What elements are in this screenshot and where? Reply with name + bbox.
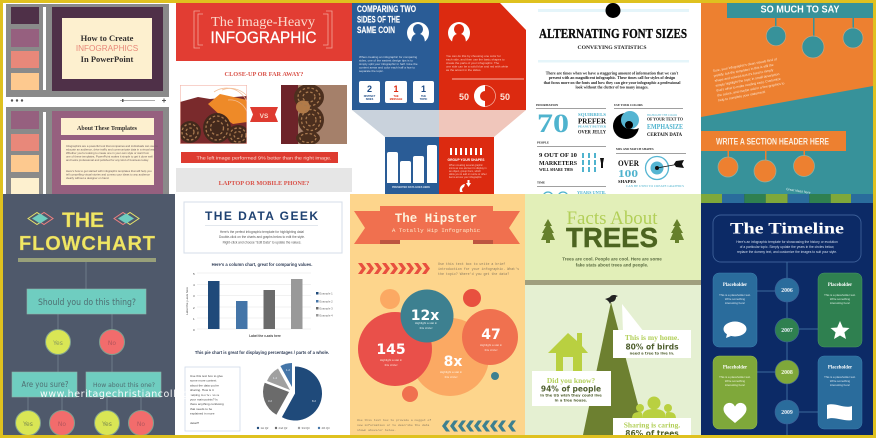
heading: SO MUCH TO SAY	[760, 4, 840, 16]
card 2008: Placeholder	[723, 366, 748, 370]
slide title: In PowerPoint	[81, 54, 133, 64]
text box: Use this text box to give	[190, 374, 223, 378]
pie chart: 1.4	[273, 376, 277, 380]
year 2009	[775, 400, 799, 424]
text box: that needs to be	[190, 407, 212, 411]
group shapes text: When creating several graphic	[449, 164, 484, 167]
about text: tell compelling visual stories and convey your ideas to any audience	[66, 172, 150, 176]
bubble chart: Highlight a stat in	[415, 321, 437, 325]
header frame: Right-click and choose "Edit Data" to update the values.	[223, 240, 302, 244]
box: are you sure: Are you sure?	[22, 380, 69, 389]
section header	[701, 131, 846, 151]
about heading: About These Templates	[77, 126, 138, 132]
bar chart	[387, 145, 437, 189]
teal hanging circles	[766, 18, 863, 58]
section: information: PEANUT BUTTER	[578, 124, 607, 128]
title: THE	[62, 209, 104, 232]
section: people: WILL SHARE THIS	[539, 167, 574, 172]
text box: explained in more	[190, 412, 215, 416]
heading	[211, 16, 316, 44]
bubble chart	[358, 289, 518, 402]
text box: helping to drive home	[190, 393, 220, 397]
slanted text: help to complete your statement!	[718, 90, 766, 102]
column chart: 0	[193, 328, 195, 332]
column chart: 4	[193, 283, 195, 287]
intro text	[562, 256, 662, 268]
card 2009: Placeholder	[828, 366, 853, 370]
right text: as the accent in the slides.	[446, 68, 482, 72]
stat cards: THE	[421, 95, 426, 98]
year 2006: 2006	[781, 288, 793, 294]
group shapes text: allow you to add or resize or other	[449, 173, 487, 176]
callout: sharing: 86% of trees	[625, 429, 679, 438]
callout: did you know	[532, 371, 611, 406]
year 2006	[775, 278, 799, 302]
section: shapes	[616, 147, 686, 188]
icon: black dot	[606, 3, 620, 18]
pie chart: 3.2	[268, 399, 272, 403]
left text: When creating an infographic for comparing	[359, 55, 418, 59]
year 2008: 2008	[781, 370, 793, 376]
intro paragraph	[544, 72, 681, 90]
bubble chart: 145	[376, 342, 406, 358]
slide title: How to Create	[81, 33, 134, 43]
pie legend: 1st Qtr	[260, 426, 269, 430]
title	[566, 208, 658, 253]
bubble chart: Highlight a stat in	[380, 358, 402, 362]
column chart: 5	[193, 272, 195, 276]
section: shapes: SHAPES	[618, 179, 637, 184]
bubble chart: Highlight a stat in	[440, 370, 462, 374]
chart legend: Example 2	[320, 300, 333, 304]
panel: the timeline	[701, 194, 873, 435]
donut stat: 50	[500, 92, 510, 102]
pie chart	[263, 363, 322, 420]
panel: facts about trees	[525, 194, 701, 438]
stat cards: TOPIC	[420, 98, 427, 101]
group shapes text: an object, group them, which	[449, 170, 482, 173]
section: shapes: MIX AND MATCH SHAPES	[616, 147, 654, 151]
slanted text: Sure, your infographic's clean visuals kind of	[712, 57, 777, 73]
pie legend: 4th Qtr	[322, 426, 330, 430]
text box: your main points? Is	[190, 398, 218, 402]
header box: Here's an infographic template for showcasing the history or evolution	[736, 240, 838, 244]
stat cards: 1	[421, 84, 426, 94]
year 2009: 2009	[781, 410, 793, 416]
callout: did you know: in the US wish they could live	[540, 394, 602, 398]
title: Facts About	[566, 208, 658, 229]
group shapes text: icons as one element to display in	[449, 167, 487, 170]
section: people: MARKETERS	[539, 160, 577, 167]
callout: my home	[613, 330, 691, 358]
bottom nodes: Yes	[101, 421, 112, 428]
heading: INFOGRAPHIC	[210, 28, 316, 47]
group shapes text	[448, 148, 487, 192]
orange hanging circles	[718, 151, 814, 182]
section: people: 9 OUT OF 10	[539, 152, 577, 159]
outro text: shown above/or below.	[357, 428, 396, 432]
section: shapes: CAN BE USED TO CREATE GRAPHICS	[626, 184, 684, 188]
card 2007: Write something	[830, 297, 851, 301]
result bar	[181, 152, 338, 163]
about text: Infographics are a powerful tool that companies and individuals can use to	[66, 144, 158, 148]
callout: my home: 80% of birds	[625, 342, 679, 352]
slanted text: shape and colored text it's hard to simply	[714, 68, 774, 83]
outro text: new information or to describe the data	[357, 423, 430, 427]
year 2007: 2007	[781, 328, 793, 334]
about text: and looks professional and polished for any kind of business today.	[66, 158, 149, 162]
card 2009: This is a placeholder text.	[824, 375, 856, 379]
section: people	[537, 140, 606, 172]
section: time: YEARS UNTIL	[577, 190, 606, 195]
column chart: Label the y-axis here	[185, 287, 189, 315]
section: people: PEOPLE	[537, 140, 549, 144]
card 2006: Write something	[725, 297, 746, 301]
stat cards: THE	[394, 95, 399, 98]
icon: person red	[448, 22, 470, 44]
photo 1	[179, 85, 249, 145]
bubble chart: 47	[481, 327, 501, 343]
panel: alternating font sizes	[527, 3, 701, 202]
left text: separate the topic.	[359, 69, 384, 73]
header box: The Timeline	[730, 220, 844, 238]
slide controls	[11, 98, 166, 102]
card 2008	[713, 356, 757, 429]
ribbon banner	[354, 206, 520, 244]
slanted text: prettify, but the templates in this is still the	[713, 63, 774, 78]
right text: one side can be a solid blue and red with white	[446, 64, 509, 68]
section: information: PREFER	[578, 118, 607, 126]
left text	[359, 55, 418, 73]
chart legend: Example 4	[320, 314, 333, 318]
intro paragraph: that focus more on the fonts and how they can give your infographic a professional	[544, 81, 681, 85]
icon: person blue	[407, 22, 429, 44]
no node: No	[108, 340, 116, 347]
header frame: THE DATA GEEK	[205, 209, 318, 223]
intro text: Trees are cool. People are cool. Here are some	[562, 256, 662, 262]
chart title: Here's a column chart, great for comparing values.	[212, 262, 312, 267]
stat cards: SIDES	[366, 98, 374, 101]
section: information	[536, 104, 606, 134]
question 2: LAPTOP OR MOBILE PHONE?	[219, 180, 309, 187]
text box: sharing. How is it	[190, 388, 214, 392]
intro text	[438, 262, 519, 276]
donut stat	[459, 85, 510, 107]
card 2007: This is a placeholder text.	[824, 293, 856, 297]
question 1: CLOSE-UP OR FAR AWAY?	[225, 71, 303, 78]
left text: sides, one of the easiest design tips is to	[359, 58, 413, 62]
icon: right diamond	[114, 212, 139, 224]
right text: create the parts of your infographic. The	[446, 61, 499, 65]
card 2007: interesting here!	[830, 301, 850, 305]
callout: did you know: 94% of people	[541, 384, 601, 394]
slanted text	[712, 57, 786, 102]
text box: detail?	[190, 421, 199, 425]
donut stat: 50	[459, 92, 469, 102]
bubble chart: this circle!	[385, 363, 398, 367]
question box	[27, 289, 146, 314]
year 2008	[775, 360, 799, 384]
panel: the flowchart	[3, 194, 175, 436]
funnel	[352, 110, 526, 137]
panel: the data geek	[175, 194, 350, 435]
panel: the hipster	[350, 194, 525, 435]
right text: You can do this by choosing one color for	[446, 54, 501, 58]
left text: simply split your infographic in half. Give the	[359, 62, 418, 66]
pie legend: 3rd Qtr	[302, 426, 310, 430]
about text: one of these templates, PowerPoint makes it simple to get it done well	[66, 154, 153, 158]
intro paragraph: There are times when we have a staggering amount of information that we can't	[546, 72, 679, 76]
panel: image-heavy infographic	[176, 3, 352, 194]
slanted text: that's what to make reading easy. Customize	[716, 77, 781, 93]
icon: bird	[605, 295, 618, 304]
panel: two sides of the coin	[352, 3, 527, 194]
bubble chart: this circle!	[445, 375, 458, 379]
bubble chart: this circle!	[420, 326, 433, 330]
slide title	[76, 36, 138, 62]
header frame	[184, 202, 342, 253]
section: shapes: 100	[618, 168, 639, 180]
card 2009: Write something	[830, 379, 851, 383]
colour stripes	[701, 194, 873, 203]
section: colors	[613, 103, 683, 139]
pie chart: 1.2	[286, 368, 290, 372]
section header: WRITE A SECTION HEADER HERE	[716, 136, 829, 146]
bar chart: PRESENTED DATA GOES HERE	[392, 186, 430, 189]
intro paragraph: present with an magnificent infographic. These times call for styles of design	[549, 76, 676, 80]
stat cards: 2	[367, 84, 372, 94]
section: information: 70	[537, 109, 569, 138]
heading: SIDES OF THE	[357, 14, 400, 26]
card 2009	[818, 356, 862, 429]
section: colors: HIGHLIGHT THE COLOR	[647, 113, 678, 117]
text box	[185, 367, 240, 431]
stat cards: DISTINCT	[364, 95, 376, 98]
section: time: TIME	[537, 180, 545, 184]
bottom nodes: No	[137, 421, 145, 428]
watermark: www.heritagechristiancollege.com	[40, 389, 221, 400]
intro text: Use this text box to write a brief	[438, 262, 505, 266]
callout: did you know: in a tree house.	[555, 398, 588, 402]
chevrons red	[358, 263, 430, 274]
column chart: 3	[193, 294, 195, 298]
card 2009: interesting here!	[830, 383, 850, 387]
about text	[66, 144, 158, 180]
bottom nodes: No	[58, 421, 66, 428]
slanted text: simply highlight the topic in small description	[715, 72, 780, 88]
ribbon banner: A Totally Hip Infographic	[392, 227, 481, 234]
box: how about this one: How about this one?	[93, 381, 155, 389]
card 2008: Write something	[725, 379, 746, 383]
header box: of a particular topic. Simply update the years in the circles below,	[740, 245, 834, 249]
heading: The Image-Heavy	[211, 14, 315, 29]
speech beam	[622, 304, 644, 332]
group shapes text: GROUP YOUR SHAPES	[448, 158, 485, 162]
section: information: SQUIRRELS	[578, 112, 607, 117]
intro text: fake stats about trees and people.	[576, 262, 648, 268]
subtitle: CONVEYING STATISTICS	[578, 45, 646, 51]
title	[19, 209, 155, 255]
callout: my home: need a tree to live in.	[630, 352, 675, 356]
VS ribbon: VS	[260, 113, 269, 120]
stat cards	[359, 81, 434, 103]
card 2008: This is a placeholder text.	[719, 375, 751, 379]
box: are you sure	[12, 372, 77, 397]
heading: SAME COIN	[357, 25, 395, 36]
yes node	[46, 330, 70, 354]
icon: people	[632, 396, 676, 419]
pie chart: 8.2	[312, 399, 316, 403]
header box: replace the dummy text, and customize the images to suit your style.	[737, 250, 837, 254]
title: ALTERNATING FONT SIZES	[539, 26, 687, 41]
title: FLOWCHART	[19, 233, 155, 255]
card 2007: Placeholder	[828, 283, 853, 288]
section: colors: EMPHASIZE	[647, 123, 683, 131]
header frame: Here's the perfect infographic template for highlighting data!	[220, 230, 304, 234]
about text: Here's how to get started with infographic templates that will help you	[66, 169, 152, 173]
section: time	[537, 182, 606, 194]
text box: about the data you're	[190, 383, 219, 387]
bubble chart: 12x	[411, 308, 439, 324]
icon: left diamond	[28, 212, 53, 224]
bottom nodes: Yes	[22, 421, 33, 428]
icon: left tree	[541, 219, 555, 243]
chart legend: Example 1	[320, 292, 333, 296]
callout: my home: This is my home.	[625, 333, 679, 342]
pie title: This pie chart is great for displaying percentages / parts of a whole.	[195, 350, 329, 355]
section: shapes: OVER	[618, 159, 639, 168]
about text: educate an audience, drive traffic and communicate data in a visual way	[66, 148, 156, 152]
icon: house	[548, 333, 588, 373]
panel: so much to say	[701, 3, 873, 195]
title: TREES	[566, 222, 658, 253]
bottom nodes	[16, 410, 154, 436]
question box: Should you do this thing?	[38, 298, 136, 308]
VS ribbon	[250, 107, 278, 122]
heading	[357, 5, 416, 34]
header box	[713, 215, 861, 262]
bubble chart: this circle!	[485, 348, 498, 352]
result bar: The left image performed 9% better than the right image.	[196, 156, 332, 160]
pie legend	[257, 426, 330, 430]
card 2006: Placeholder	[723, 283, 748, 288]
header frame: Double-click on the charts and graphs below to edit the style.	[219, 235, 305, 239]
brackets	[194, 11, 332, 48]
year 2007	[775, 318, 799, 342]
card 2006	[713, 273, 757, 347]
left text: content areas and color each half a hue to	[359, 66, 415, 70]
right text: each side, and then use the basic shapes to	[446, 58, 505, 62]
callout: sharing	[613, 418, 691, 438]
photo 2	[281, 84, 347, 145]
chevrons teal	[442, 420, 516, 432]
column chart	[185, 272, 311, 338]
ribbon banner: The Hipster	[395, 212, 477, 226]
right text	[446, 55, 508, 71]
section: colors: CERTAIN DATA	[647, 133, 682, 138]
column chart: 2	[193, 306, 195, 310]
callout: did you know: Did you know?	[547, 376, 595, 385]
box: how about this one	[86, 372, 161, 397]
intro paragraph: look without the clutter of too many images.	[576, 86, 649, 90]
group shapes text: items across your infographic.	[449, 176, 483, 179]
no node	[100, 330, 124, 354]
lower slanted text: Great ideas here	[786, 187, 811, 195]
timeline lines	[757, 262, 818, 435]
bubble chart: 8x	[444, 354, 462, 370]
heading: COMPARING TWO	[357, 4, 416, 15]
outro text: Use this text box to provide a nugget of	[357, 418, 431, 422]
panel: PowerPoint slides	[3, 3, 176, 195]
card 2007	[818, 273, 862, 347]
section: information: OVER JELLY	[578, 130, 606, 136]
about text: Whether you're looking to create one in your own style or start from	[66, 151, 150, 155]
callout: sharing: Sharing is caring.	[624, 420, 680, 430]
column chart: 1	[193, 317, 195, 321]
card 2006: This is a placeholder text.	[719, 293, 751, 297]
slanted text: the colors, and maybe add in a few graphics to	[717, 81, 785, 98]
pie legend: 2nd Qtr	[278, 426, 288, 430]
text box: there anything confusing	[190, 402, 224, 406]
card 2006: interesting here!	[725, 301, 745, 305]
section: information: INFORMATION	[536, 103, 559, 107]
yes node: Yes	[52, 340, 63, 347]
intro text: the topic? Where'd you get the data?	[438, 272, 509, 276]
icon: right tree	[670, 219, 684, 243]
stat cards: 1	[393, 84, 399, 94]
about text: clearly without a designer on hand.	[66, 176, 109, 180]
column chart: Label the x-axis here	[249, 334, 281, 338]
section: colors: OF YOUR TEXT TO	[647, 116, 683, 122]
stat cards: MESSAGE	[390, 98, 403, 101]
big tree	[583, 302, 646, 435]
slide title: INFOGRAPHICS	[76, 44, 139, 53]
connectors	[28, 262, 141, 411]
chart legend	[316, 292, 333, 318]
text box: some more context	[190, 379, 216, 383]
section: colors: USE YOUR COLORS	[614, 103, 643, 107]
intro text: introduction for your infographic. What's	[438, 267, 519, 271]
bubble chart: Highlight a stat in	[480, 343, 502, 347]
card 2008: interesting here!	[725, 383, 745, 387]
outro text	[357, 418, 431, 432]
chart legend: Example 3	[320, 306, 333, 310]
